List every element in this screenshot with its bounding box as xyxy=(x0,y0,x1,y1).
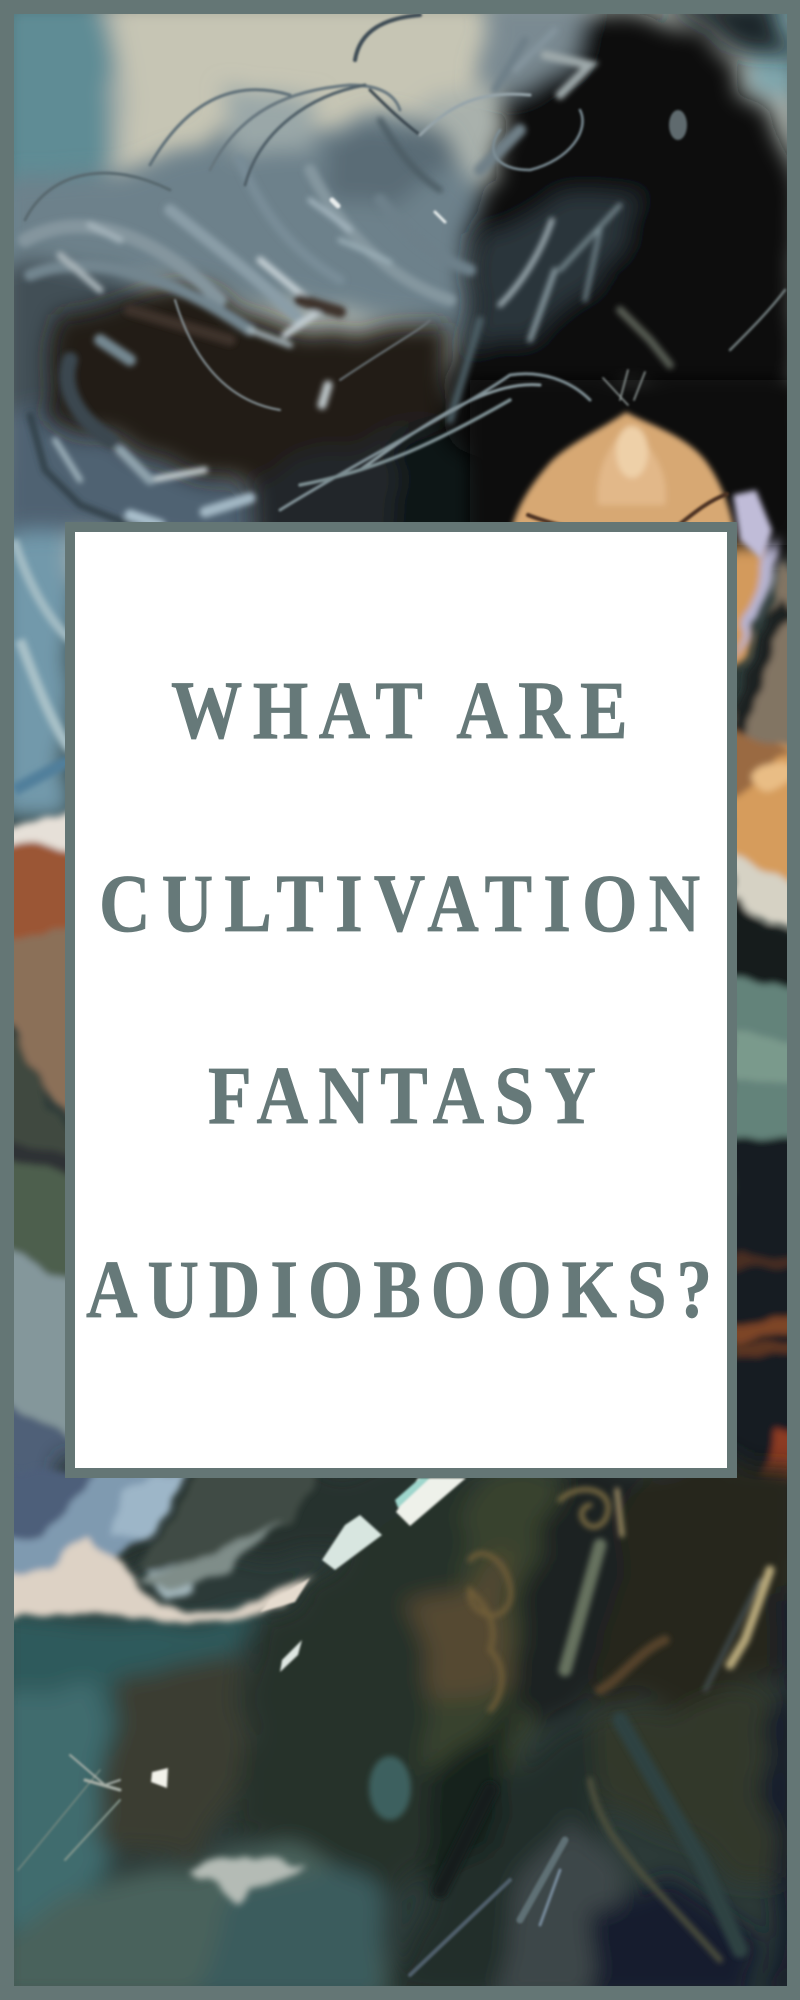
painting: gold embroidery swirls xyxy=(470,1490,770,1710)
painting: black hair on head and top bun xyxy=(440,0,800,570)
painting: grey-blue flowing hair mass xyxy=(0,80,500,540)
painting: left side strip landscape xyxy=(14,808,65,1476)
painting: mid-tone hair strokes xyxy=(25,30,670,525)
title panel: white card with slate border xyxy=(65,522,737,1478)
title line 1: WHAT ARE xyxy=(171,664,628,756)
title line 4: AUDIOBOOKS? xyxy=(86,1243,712,1335)
painting: dark brown hair mass xyxy=(33,270,482,522)
painting: blue streaks on left strip xyxy=(14,540,70,790)
painting: black hair around face xyxy=(470,380,800,545)
painting: teal spot and splash xyxy=(192,1756,411,1905)
painting: dark and pale flowing folds xyxy=(440,1720,740,1960)
painting: fine hair curl strands xyxy=(25,15,785,510)
painting: sky and background washes xyxy=(0,0,800,820)
painting: streaks on lower robe xyxy=(18,1755,565,1975)
painting: closed brow lines xyxy=(528,494,727,528)
painting: snow, mountains and white cloth xyxy=(0,1470,320,1622)
title line 2: CULTIVATION xyxy=(99,857,700,949)
painting: white highlights on robe xyxy=(151,1478,466,1788)
painting: lower robe base colours xyxy=(0,1460,800,2000)
painting: right side strip xyxy=(737,532,787,1482)
title line 3: FANTASY xyxy=(208,1049,596,1141)
painting: forehead and face xyxy=(510,412,772,560)
